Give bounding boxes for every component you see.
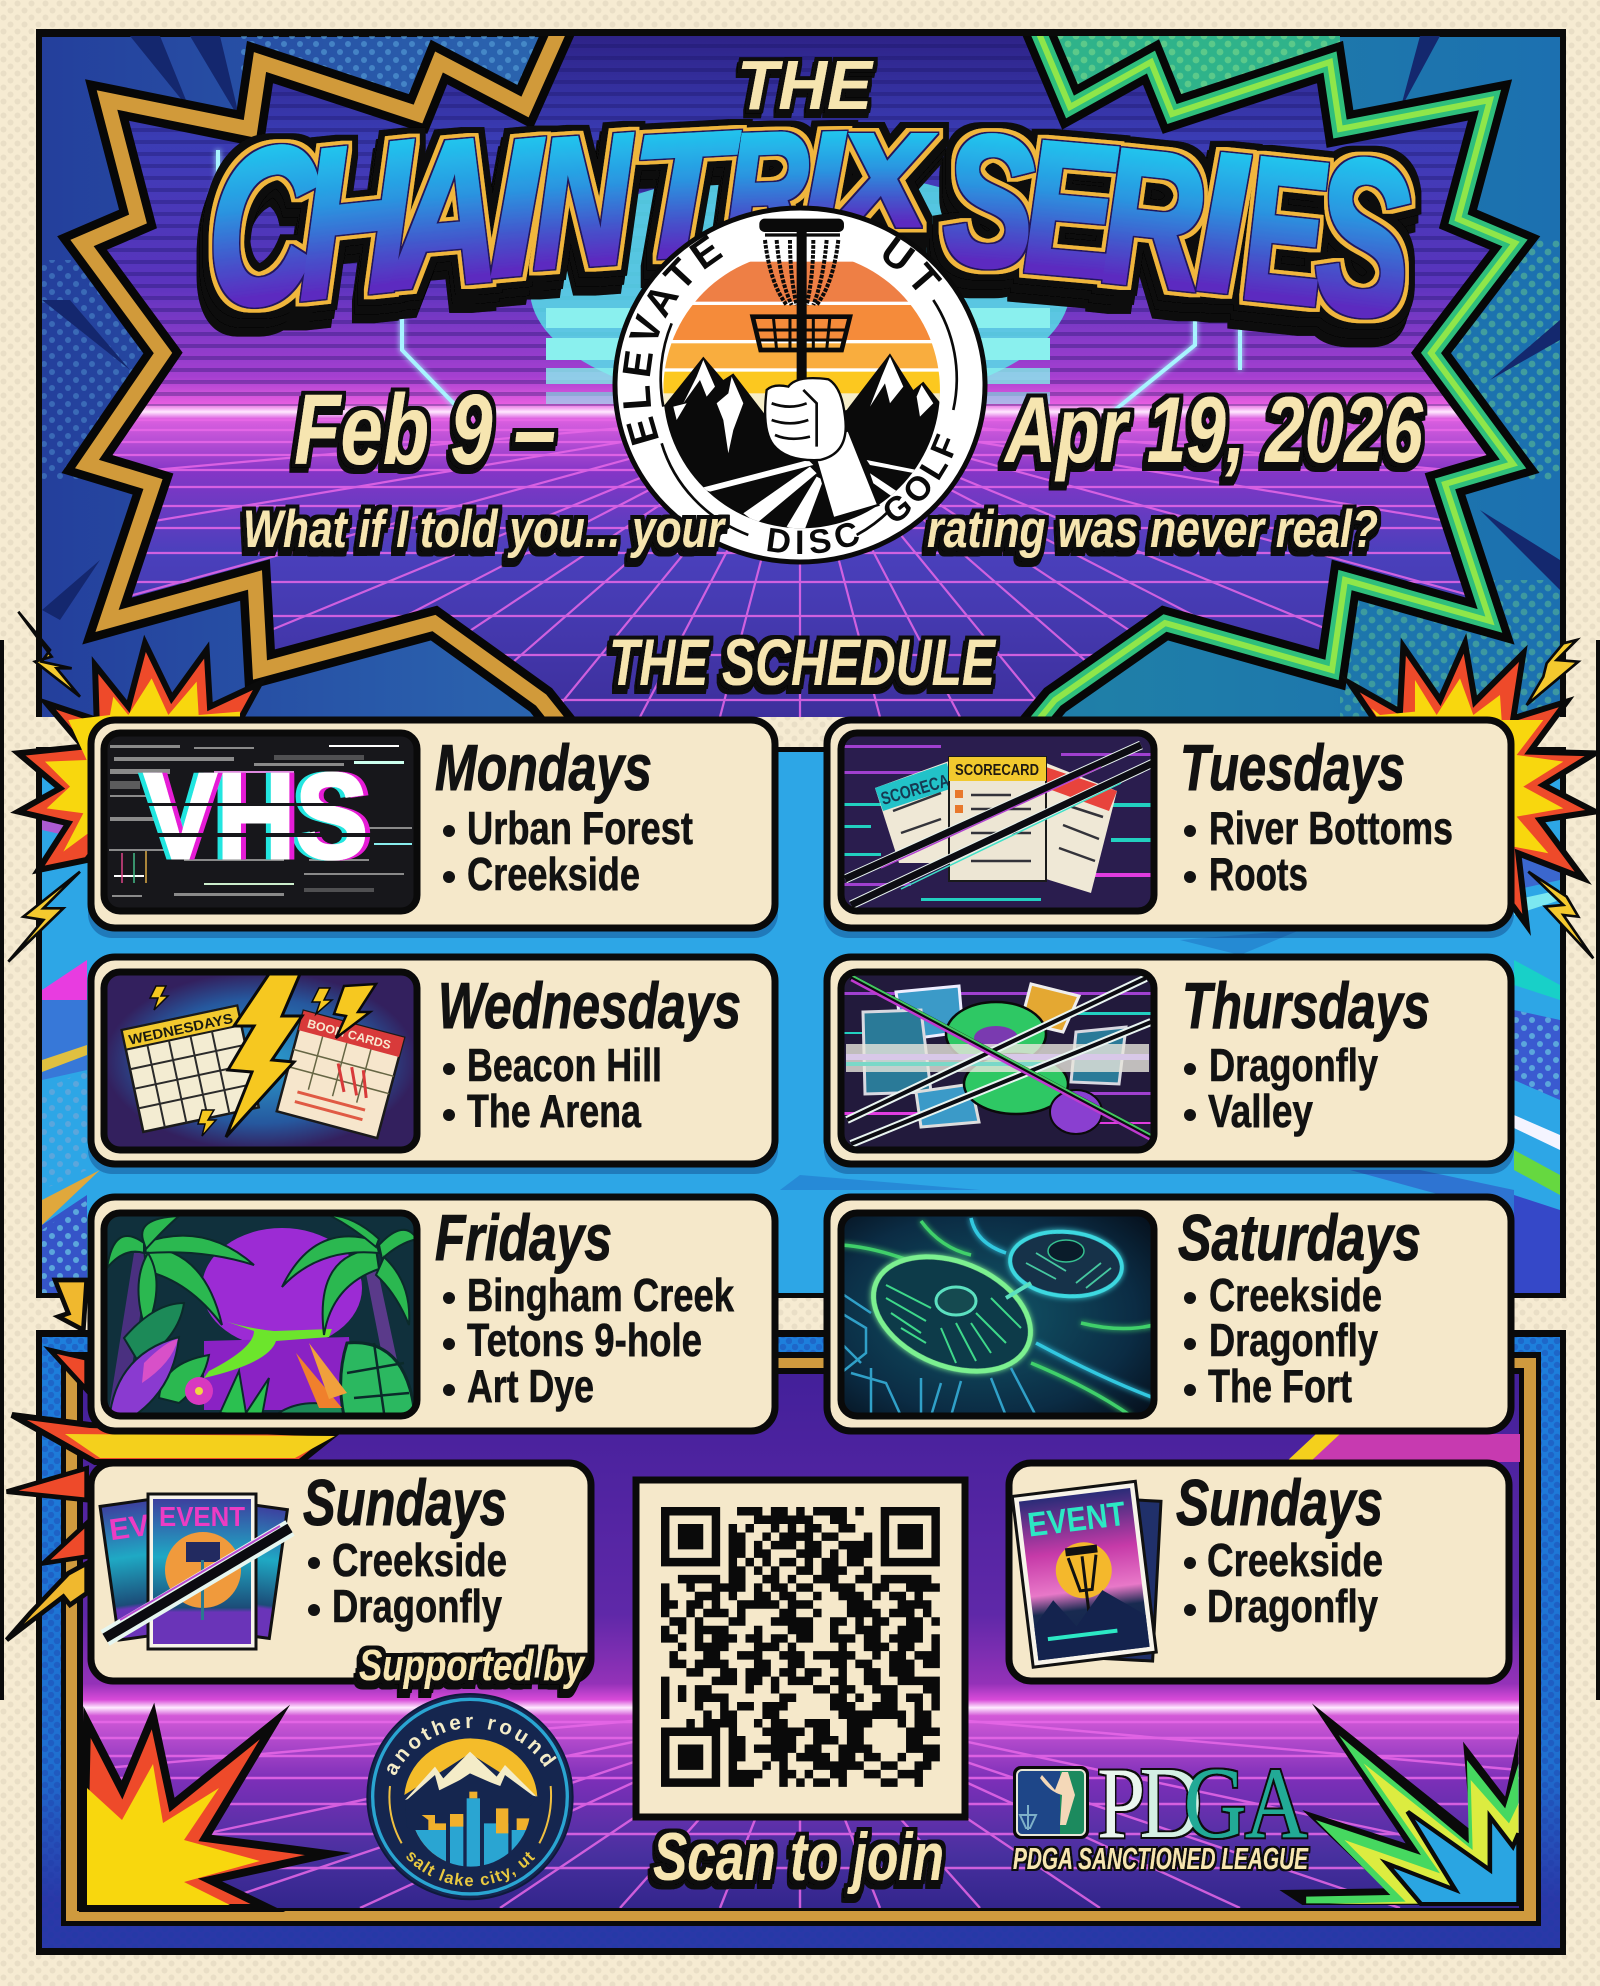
gold burst outline [82, 24, 565, 730]
tagline left: What if I told you... your [243, 500, 727, 559]
panel: middle blue scene [36, 747, 1566, 1298]
title: CHAINTRIX SERIES: R [1102, 106, 1202, 331]
burst: top-left comic explosion [8, 612, 260, 962]
icon: disc golf basket [753, 219, 850, 380]
heading: Sundays: Sundays [1176, 1466, 1383, 1539]
icon: event posters slashed [100, 1494, 290, 1649]
list: Thursdays courses: Valley [1208, 1085, 1313, 1137]
icon: calendars and lightning thumbnail: WEDNESDAYS [127, 1010, 234, 1048]
list: Thursdays courses: Dragonfly [1209, 1039, 1378, 1091]
tagline right: rating was never real? [927, 500, 1378, 559]
list: Mondays courses [443, 802, 693, 900]
icon: scorecards slashed thumbnail [841, 733, 1154, 911]
list: Sundays right courses [1184, 1534, 1383, 1632]
icon: event poster [1012, 1479, 1180, 1676]
burst: band between Friday and Sunday cards [12, 1415, 1520, 1462]
list: Fridays courses: Tetons 9-hole [467, 1314, 702, 1366]
title: CHAINTRIX SERIES: A [388, 95, 500, 332]
list: Tuesdays courses: Roots [1209, 848, 1308, 900]
icon: lightning bolt upper right [1527, 640, 1578, 705]
list: Sundays left courses [308, 1534, 507, 1632]
panel: Tuesdays [827, 720, 1511, 928]
list: Sundays left courses: Dragonfly [332, 1580, 502, 1632]
logo: PDGA [1013, 1748, 1309, 1876]
icon: lightning bolt lower left [8, 872, 80, 962]
icon: lightning bolt lower right [1528, 872, 1593, 958]
list: Wednesdays courses: The Arena [467, 1085, 641, 1137]
panel: top synthwave scene [36, 24, 1566, 730]
logo: another round [366, 1693, 574, 1900]
icon: tropical jungle thumbnail [104, 1213, 417, 1416]
title: CHAINTRIX SERIES [208, 94, 1410, 367]
burst interior [42, 36, 1560, 717]
title: CHAINTRIX SERIES: S [944, 94, 1034, 308]
list: Sundays right courses: Dragonfly [1207, 1580, 1378, 1632]
logo: Elevate UT Disc Golf [612, 206, 988, 564]
icon: calendars and lightning thumbnail: BOOM CARDS [306, 1016, 392, 1052]
list: Fridays courses [443, 1269, 734, 1412]
icon: calendars and lightning thumbnail [104, 972, 417, 1150]
heading: Thursdays: Thursdays [1182, 969, 1430, 1042]
heading: Tuesdays: Tuesdays [1180, 731, 1405, 804]
burst: top-right comic explosion [1350, 640, 1595, 958]
logo ring text: ELEVATE [622, 234, 724, 446]
list: Tuesdays courses: River Bottoms [1209, 802, 1453, 854]
panel: Sundays left [91, 1463, 591, 1681]
icon: scorecards slashed thumbnail: SCORECARD [955, 762, 1039, 779]
wordmark PDGA: A [1245, 1748, 1308, 1860]
badge text [387, 1716, 557, 1886]
card shadows [88, 724, 1514, 1174]
wordmark PDGA: G [1184, 1748, 1246, 1860]
icon: discs and glitch thumbnail [841, 972, 1154, 1150]
QR code modules [661, 1507, 940, 1787]
icon: event posters slashed: EV [107, 1509, 151, 1547]
heading: Saturdays: Saturdays [1178, 1201, 1421, 1274]
list: Saturdays courses [1184, 1269, 1382, 1412]
logo ring text [622, 234, 954, 554]
panel: Wednesdays [91, 957, 775, 1164]
heading: Sundays: Sundays [303, 1466, 507, 1539]
icon: scorecards slashed thumbnail: SCORECA [879, 770, 951, 809]
burst: bottom-left corner [83, 1716, 328, 1908]
panel: Fridays [91, 1197, 775, 1431]
title: CHAINTRIX SERIES: I [804, 103, 844, 263]
title: CHAINTRIX SERIES: R [726, 98, 808, 280]
list: Wednesdays courses: Beacon Hill [467, 1039, 662, 1091]
list: Fridays courses: Bingham Creek [467, 1269, 734, 1321]
panel: Saturdays [827, 1197, 1511, 1431]
heading: Fridays: Fridays [435, 1201, 612, 1274]
logo ring text: UT [883, 236, 942, 290]
logo ring text: DISC [767, 522, 859, 554]
burst: lower-left shards [7, 1280, 87, 1640]
heading: Wednesdays: Wednesdays [438, 969, 741, 1042]
badge text: another round [387, 1716, 557, 1775]
panel: QR code [636, 1480, 965, 1817]
list: Tuesdays courses [1184, 802, 1453, 900]
icon: lightning bolt upper left [18, 612, 80, 697]
logo ring text: GOLF [884, 433, 954, 521]
title: CHAINTRIX SERIES: S [1316, 108, 1410, 367]
heading: the schedule: THE SCHEDULE [609, 625, 996, 699]
icon: event poster: EVENT [1026, 1495, 1128, 1545]
panel: bottom framed scene [36, 1330, 1566, 1955]
label: scan to join: Scan to join [653, 1819, 944, 1895]
list: Wednesdays courses [443, 1039, 662, 1137]
list: Fridays courses: Art Dye [467, 1360, 594, 1412]
title: CHAINTRIX SERIES: X [832, 107, 933, 253]
list: Sundays right courses: Creekside [1207, 1534, 1383, 1586]
list: Mondays courses: Urban Forest [467, 802, 693, 854]
list: Mondays courses: Creekside [467, 848, 640, 900]
heading: Mondays: Mondays [435, 731, 652, 804]
list: Saturdays courses: Dragonfly [1209, 1314, 1378, 1366]
list: Saturdays courses: The Fort [1208, 1360, 1352, 1412]
title: CHAINTRIX SERIES: E [1024, 99, 1118, 318]
badge text: salt lake city, ut [406, 1852, 536, 1886]
title: CHAINTRIX SERIES: I [490, 98, 543, 317]
date start: Feb 9 – [294, 374, 556, 486]
icon: VHS glitch thumbnail: VHS [144, 748, 368, 884]
title: CHAINTRIX SERIES: N [534, 95, 633, 308]
title: CHAINTRIX SERIES: H [300, 97, 413, 345]
burst: bottom-right corner [1279, 1703, 1519, 1905]
title: CHAINTRIX SERIES: E [1244, 114, 1327, 350]
panel: Sundays right [1009, 1463, 1509, 1681]
panel: Mondays [91, 720, 775, 928]
icon: neon circuit discs thumbnail [841, 1213, 1154, 1416]
icon: event posters slashed: EVENT [159, 1501, 245, 1532]
list: Saturdays courses: Creekside [1209, 1269, 1382, 1321]
title: CHAINTRIX SERIES: I [1196, 109, 1249, 337]
panel: Thursdays [827, 957, 1511, 1164]
wordmark PDGA: P [1097, 1748, 1145, 1860]
tagline PDGA sanctioned league: PDGA SANCTIONED LEAGUE [1013, 1841, 1309, 1876]
date end: Apr 19, 2026 [1003, 377, 1424, 482]
icon: PDGA thrower [1015, 1768, 1087, 1837]
title: CHAINTRIX SERIES: C [208, 96, 318, 356]
icon: raised fist [765, 378, 878, 518]
title: THE: THE [737, 46, 874, 124]
wordmark PDGA: D [1140, 1748, 1202, 1860]
label: supported by: Supported by [359, 1641, 586, 1690]
title: CHAINTRIX SERIES: T [632, 94, 739, 295]
green burst outline [1030, 24, 1515, 730]
list: Thursdays courses [1184, 1039, 1378, 1137]
list: Sundays left courses: Creekside [332, 1534, 507, 1586]
icon: VHS glitch thumbnail [104, 733, 417, 911]
